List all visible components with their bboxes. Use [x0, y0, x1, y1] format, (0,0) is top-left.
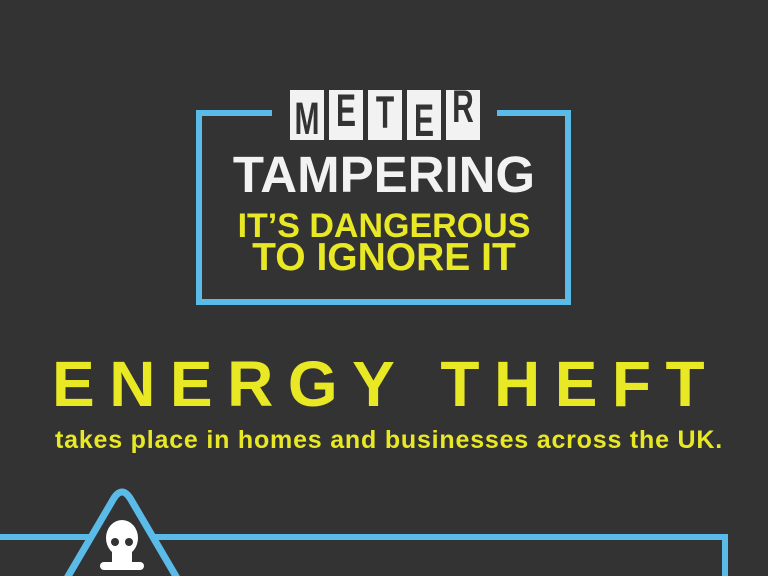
logo: METER tiles: T	[376, 90, 394, 138]
subheading: dangerous: TO IGNORE IT	[252, 236, 516, 279]
subheading: dangerous	[238, 207, 530, 279]
heading: TAMPERING: TAMPERING	[233, 146, 535, 203]
logo: METER tiles	[290, 90, 480, 140]
subtitle: takes place in homes and businesses across the UK.	[55, 426, 723, 454]
subheading: dangerous: IT’S DANGEROUS	[238, 207, 530, 245]
headline: ENERGY THEFT: ENERGY THEFT	[52, 348, 719, 420]
warning panel with skull icon	[0, 488, 728, 576]
